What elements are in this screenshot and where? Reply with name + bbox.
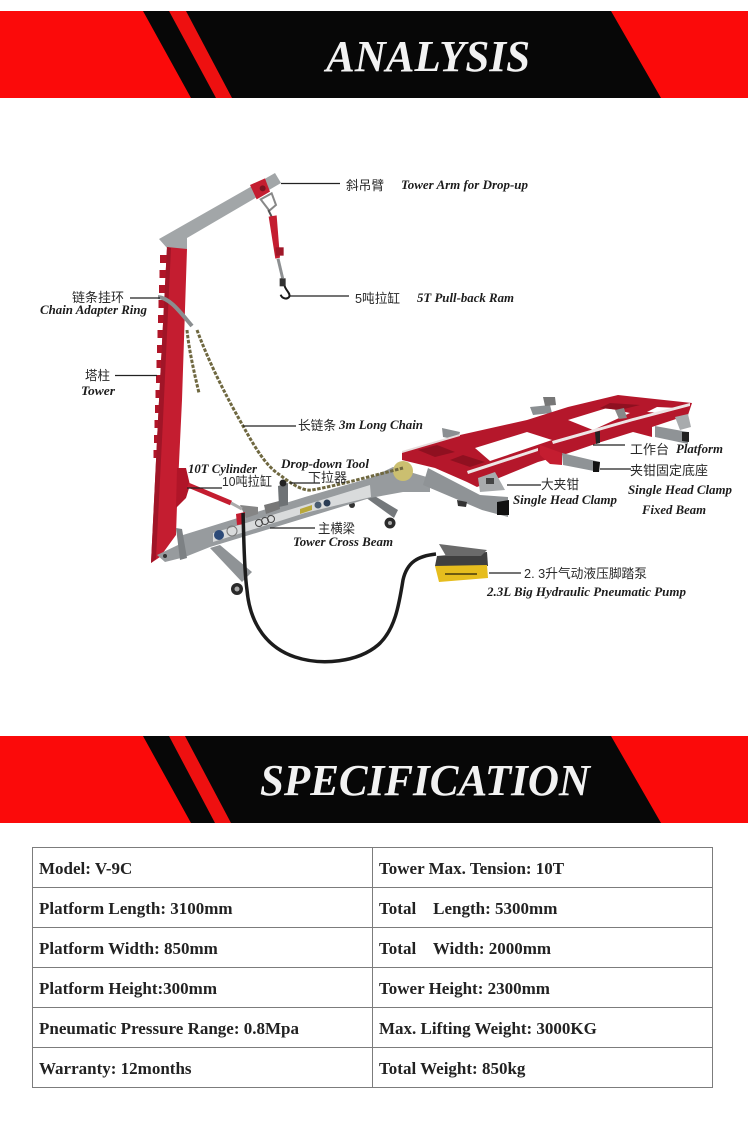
machine diagram [151,173,692,662]
tower column [151,247,190,563]
label: long chain: 长链条 [298,418,336,433]
specification table: Total Length: 5300mm [379,899,557,918]
specification table: Platform Height:300mm [39,979,217,998]
label: tower arm: Tower Arm for Drop-up [401,178,528,192]
label: single head clamp: Single Head Clamp [513,493,617,507]
label: drop-down tool: 下拉器 [308,470,347,485]
label: tower: 塔柱 [85,368,110,383]
hydraulic hose [243,513,436,662]
label: long chain [243,418,423,433]
pneumatic pump [435,544,488,582]
label: single head clamp: 大夹钳 [541,477,579,492]
tower arm [159,173,281,250]
label: chain adapter ring [40,290,160,317]
label: cylinder: 10T Cylinder [188,462,257,476]
banner: analysis [0,11,748,98]
label: cylinder: 10吨拉缸 [222,474,272,489]
specification table: Tower Max. Tension: 10T [379,859,564,878]
specification table: Total Weight: 850kg [379,1059,525,1078]
label: fixed beam: 夹钳固定底座 [630,463,708,478]
specification table [32,847,713,1088]
platform [402,395,692,517]
label: tower arm: 斜吊臂 [346,178,384,193]
heading: specification: SPECIFICATION [260,756,592,805]
label: platform: 工作台 [630,442,669,457]
specification table: Tower Height: 2300mm [379,979,550,998]
label: pump [486,566,686,599]
heading: analysis: ANALYSIS [323,32,530,81]
specification table: Max. Lifting Weight: 3000KG [379,1019,597,1038]
label: tower arm [281,178,528,193]
banner: specification [0,736,748,823]
label: single head clamp [507,477,617,507]
label: fixed beam: Single Head Clamp [628,483,732,497]
label: tower: Tower [81,384,115,398]
label: fixed beam: Fixed Beam [641,503,706,517]
chain adapter ring [158,297,192,326]
label: platform [593,442,723,457]
label: drop-down tool [280,457,370,485]
short chain [187,330,199,393]
label: cross beam [270,521,393,549]
label: pull-back ram: 5吨拉缸 [355,291,400,306]
specification table: Total Width: 2000mm [379,939,551,958]
pull-back ram and hook [250,178,290,299]
label: pump: 2. 3升气动液压脚踏泵 [524,566,647,581]
specification table: Warranty: 12months [39,1059,192,1078]
specification table: Platform Length: 3100mm [39,899,233,918]
specification table: Platform Width: 850mm [39,939,218,958]
label: cross beam: Tower Cross Beam [293,535,393,549]
label: chain adapter ring: Chain Adapter Ring [40,303,147,317]
label: platform: Platform [676,442,723,456]
label: cylinder [187,462,272,489]
specification table: Pneumatic Pressure Range: 0.8Mpa [39,1019,299,1038]
label: pump: 2.3L Big Hydraulic Pneumatic Pump [486,585,686,599]
cross beam [157,461,430,595]
long chain [197,330,403,490]
label: pull-back ram [290,291,514,306]
label: chain adapter ring: 链条挂环 [72,290,124,305]
label: long chain: 3m Long Chain [338,418,423,432]
specification table: Model: V-9C [39,859,132,878]
label: cross beam: 主横梁 [318,521,355,536]
label: fixed beam [600,463,732,517]
label: tower [81,368,157,398]
label: pull-back ram: 5T Pull-back Ram [417,291,514,305]
label: drop-down tool: Drop-down Tool [280,457,370,471]
